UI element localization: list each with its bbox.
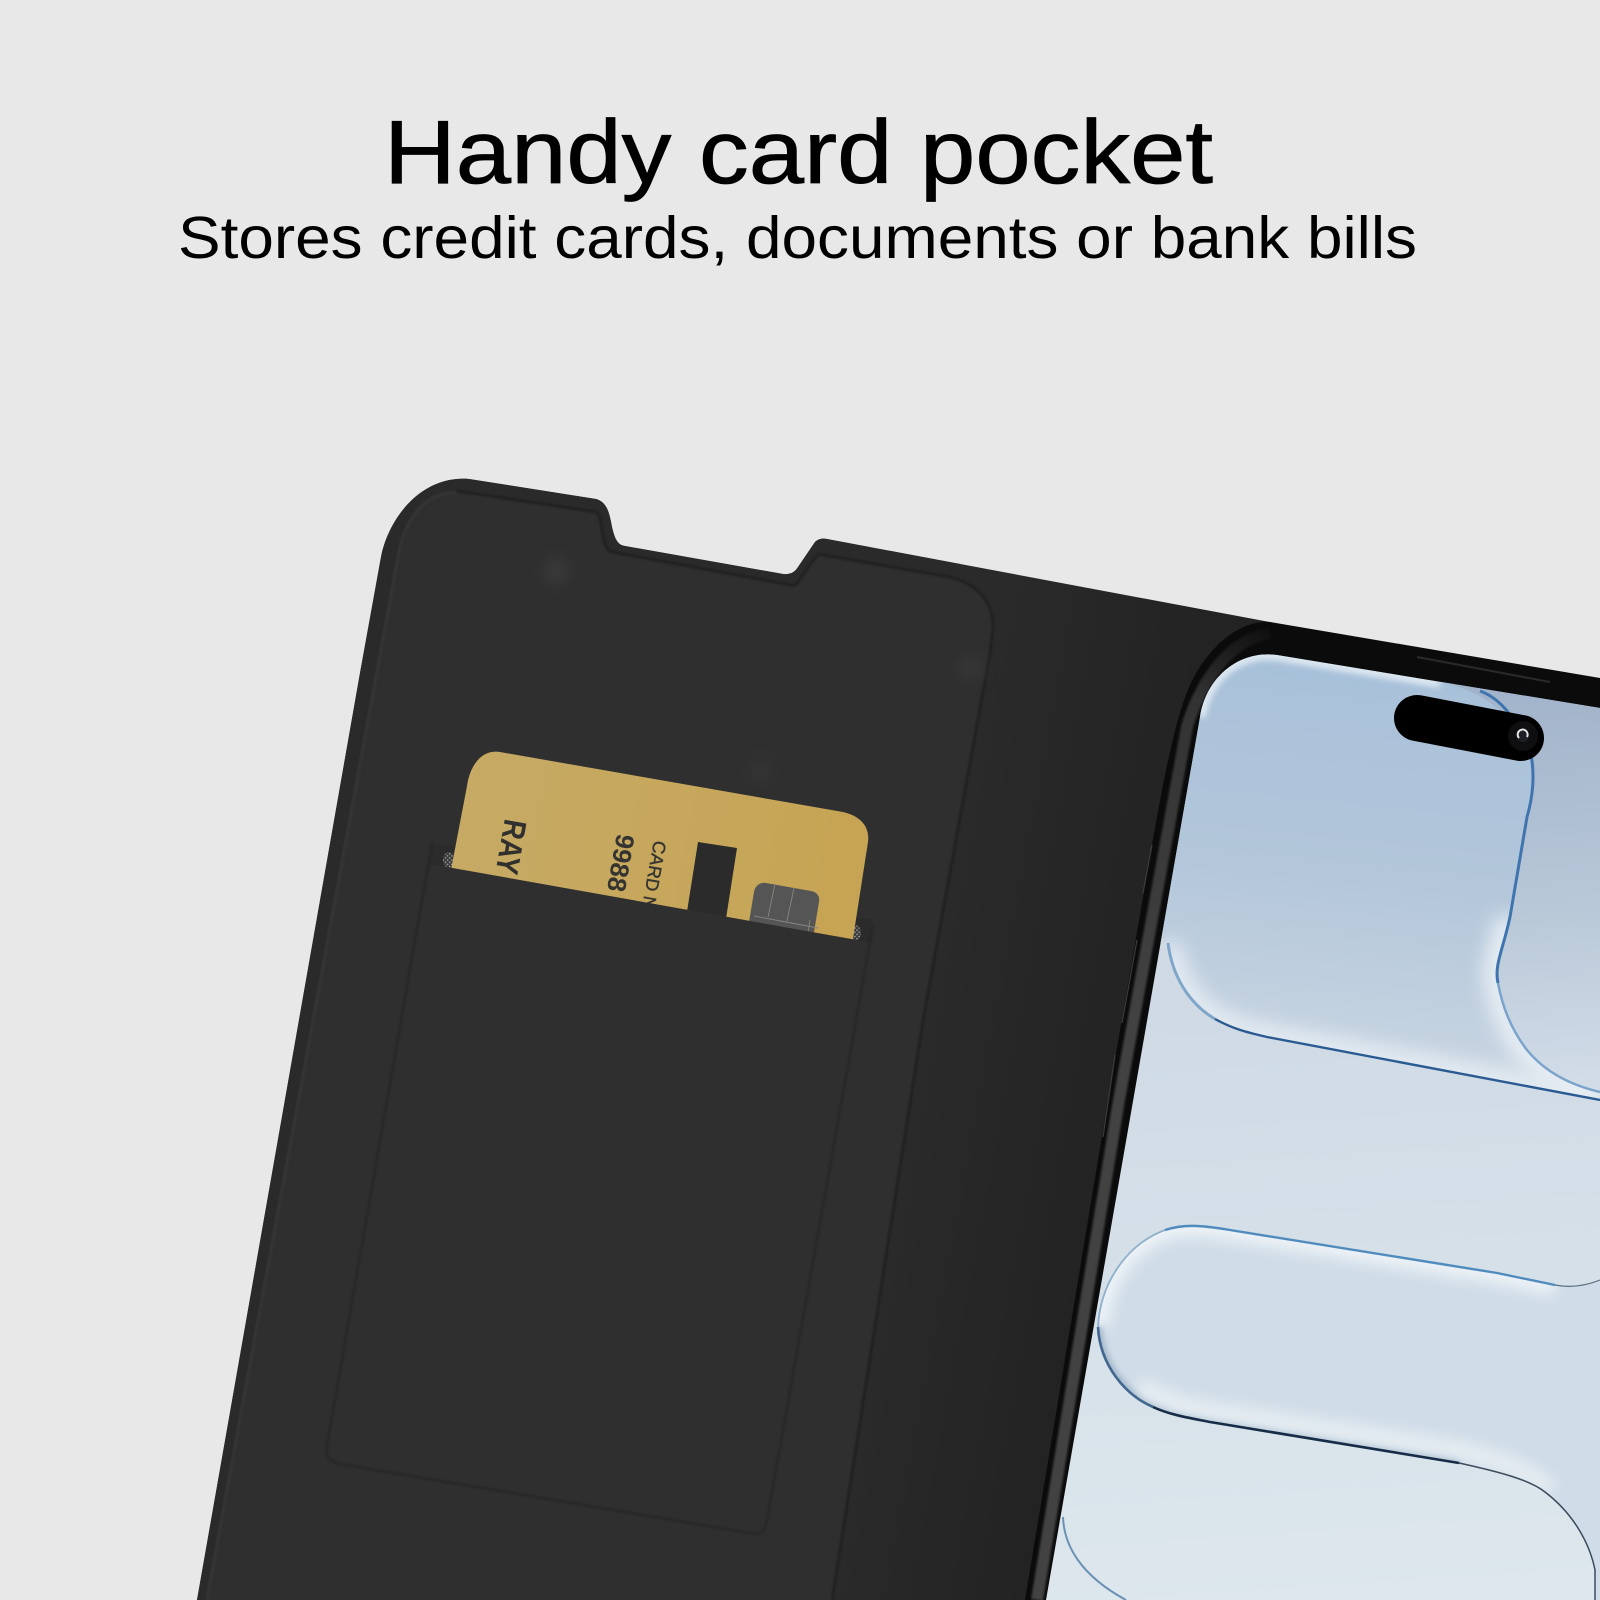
- frame metal band: [1037, 633, 1270, 1600]
- mesh dot right: [849, 925, 861, 941]
- panel edge shadow: [457, 491, 993, 1600]
- panel edge highlight: [207, 493, 457, 1600]
- card number: 9988: [601, 832, 641, 894]
- phone frame: [1025, 622, 1600, 1600]
- screen: [1040, 640, 1600, 1600]
- faint magnet spot two: [957, 655, 983, 681]
- side buttons: [1103, 845, 1152, 1137]
- phone: [1025, 622, 1600, 1600]
- card label: CARD NO: [636, 839, 670, 925]
- mesh dot left: [443, 852, 455, 868]
- pocket outline shadow: [326, 843, 873, 1534]
- faint magnet spot three: [746, 756, 774, 784]
- card name: RAY: [488, 817, 533, 877]
- left rim: [197, 479, 1000, 1600]
- pocket back rim: [428, 843, 873, 950]
- screen base: [1040, 640, 1600, 1600]
- subtitle: Stores credit cards, documents or bank bills: [178, 205, 1417, 271]
- front camera lens: [1508, 721, 1538, 751]
- gold credit card: [451, 752, 868, 940]
- faint magnet spot one: [543, 558, 569, 584]
- camera pill: [1417, 718, 1521, 738]
- title: Handy card pocket: [384, 103, 1213, 203]
- case outer shell: [197, 479, 1275, 1600]
- card slot cutout: [687, 842, 737, 917]
- pocket front panel: [326, 843, 874, 1534]
- wallpaper shape two: [1098, 1226, 1600, 1600]
- wallpaper shape one: [1160, 654, 1600, 1100]
- upper right wallpaper: [1441, 682, 1600, 1019]
- top edge button: [1417, 657, 1550, 682]
- inner cover panel: [205, 491, 993, 1600]
- wallpaper shape three edge: [1063, 1517, 1126, 1600]
- folio case, open: [197, 479, 1275, 1600]
- card body: [451, 752, 868, 940]
- chip: [749, 882, 820, 932]
